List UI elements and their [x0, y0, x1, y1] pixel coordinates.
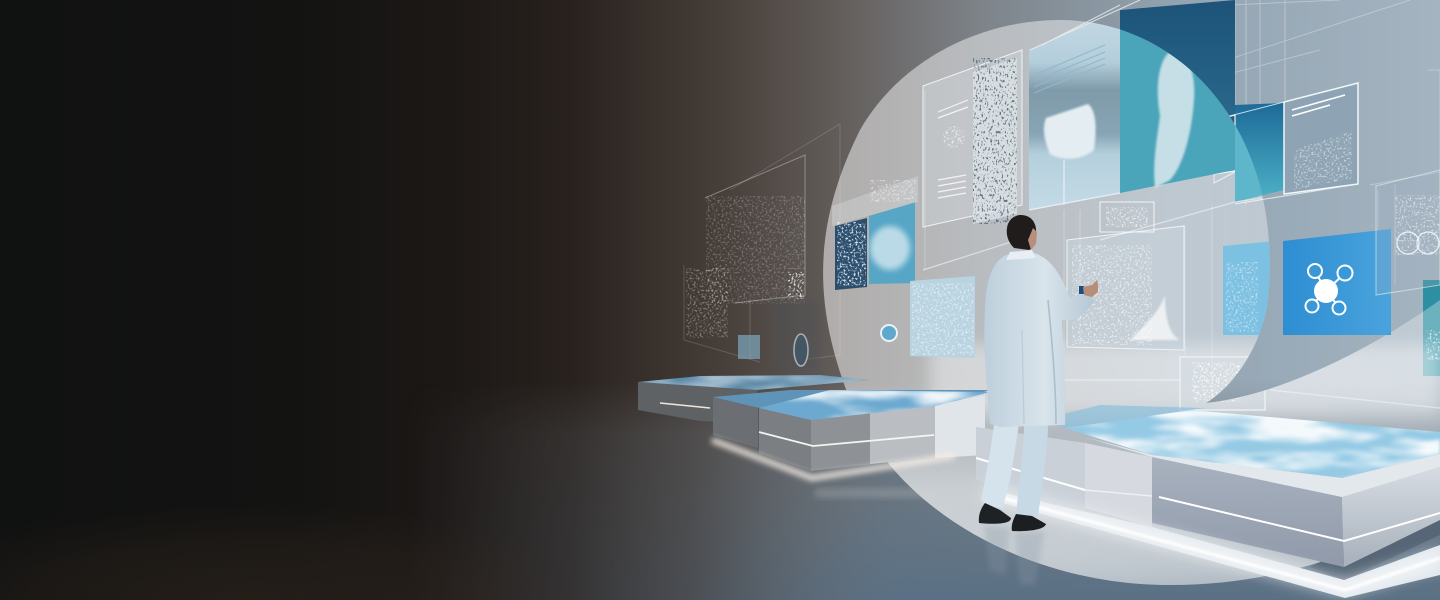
- table C floor glow: [712, 440, 955, 478]
- left shoe: [979, 503, 1011, 524]
- far right teal panel: [1423, 280, 1440, 376]
- round icon badge: [881, 325, 897, 341]
- far right sketch panel: [1376, 170, 1440, 295]
- teal tooth panel: [1120, 30, 1235, 193]
- right table middle box: [1085, 443, 1152, 527]
- small upper right sketch: [1240, 75, 1292, 105]
- small dark inset panel: [1214, 115, 1235, 174]
- warm tint bottom left: [0, 440, 620, 600]
- small ghost image tile: [738, 335, 760, 359]
- lit white floor wash: [893, 456, 1344, 585]
- frame around inset panels: [1214, 83, 1358, 204]
- light blue scan panel: [1029, 10, 1120, 210]
- right table light strip: [1159, 497, 1440, 541]
- panel row above photo tiles: [832, 176, 918, 226]
- right table rim: [1085, 437, 1440, 497]
- scan fragment white blob: [1044, 104, 1096, 159]
- dark photo tile: [835, 218, 867, 290]
- teal photo tile: [869, 202, 915, 284]
- right table side face: [1342, 467, 1440, 567]
- table C floor reflection: [815, 488, 935, 498]
- unlit holographic wall structure: [1110, 0, 1440, 290]
- icon: molecule symbol: [1306, 264, 1352, 314]
- document panel: [923, 50, 1022, 227]
- watch: [1079, 286, 1084, 294]
- head: [1007, 215, 1036, 250]
- small teal panel lit: [1235, 125, 1262, 202]
- right table floor glow: [985, 492, 1440, 588]
- outer thin top edge lines: [1030, 0, 1140, 50]
- lit blue panel speckled text: [1226, 262, 1258, 332]
- right shoe: [1012, 514, 1046, 531]
- centre sketch panel: [1067, 226, 1184, 350]
- unlit right blue screen: [1283, 229, 1391, 335]
- collar: [1006, 250, 1036, 260]
- lower small frame panel: [1180, 357, 1265, 410]
- unlit small blue panel: [1235, 103, 1284, 202]
- face edge: [1028, 228, 1037, 250]
- scientist figure: [979, 215, 1098, 585]
- icy image panel: [910, 276, 975, 358]
- molecule on lit screen: [1306, 264, 1352, 314]
- lit spotlight area: [823, 20, 1440, 585]
- table C water top: [759, 390, 990, 420]
- lab coat: [984, 253, 1094, 427]
- tooth hologram: [1154, 50, 1194, 188]
- right table water top: [1065, 410, 1440, 478]
- hand: [1083, 280, 1098, 297]
- back lit table strip: [1040, 405, 1205, 428]
- coat centre vent: [1022, 330, 1024, 424]
- right leg: [1016, 424, 1048, 516]
- far-left ghost panels: [684, 124, 840, 362]
- lit panels group: [832, 0, 1440, 410]
- right table left box: [976, 427, 1085, 510]
- small sketch card: [1100, 202, 1154, 232]
- icon: circular badge on ghost panel: [794, 334, 808, 366]
- right table floor glow core: [1000, 497, 1440, 590]
- coat shading: [1048, 300, 1056, 424]
- table B middle: [713, 390, 990, 448]
- table A back left: [638, 375, 870, 423]
- lit lower wall haze: [930, 345, 1440, 415]
- wall bright lines: [923, 90, 1440, 408]
- lit blue side panel: [1223, 242, 1270, 335]
- scan panel text lines: [1034, 45, 1105, 93]
- floor reflection: [984, 525, 1044, 585]
- dark unlit part of teal panel: [1120, 0, 1235, 193]
- scan panel divider: [1029, 160, 1120, 210]
- right table front face: [1152, 457, 1344, 567]
- right document panel: [1284, 83, 1358, 194]
- dark back tower: [770, 300, 820, 370]
- lit blue screen centre: [1386, 332, 1391, 335]
- speckled ghost block: [788, 272, 804, 299]
- left leg: [981, 424, 1019, 508]
- floor: [464, 395, 1440, 600]
- table C front faces: [759, 395, 985, 471]
- dark photo speckle: [837, 222, 866, 286]
- base platform: [985, 490, 1440, 598]
